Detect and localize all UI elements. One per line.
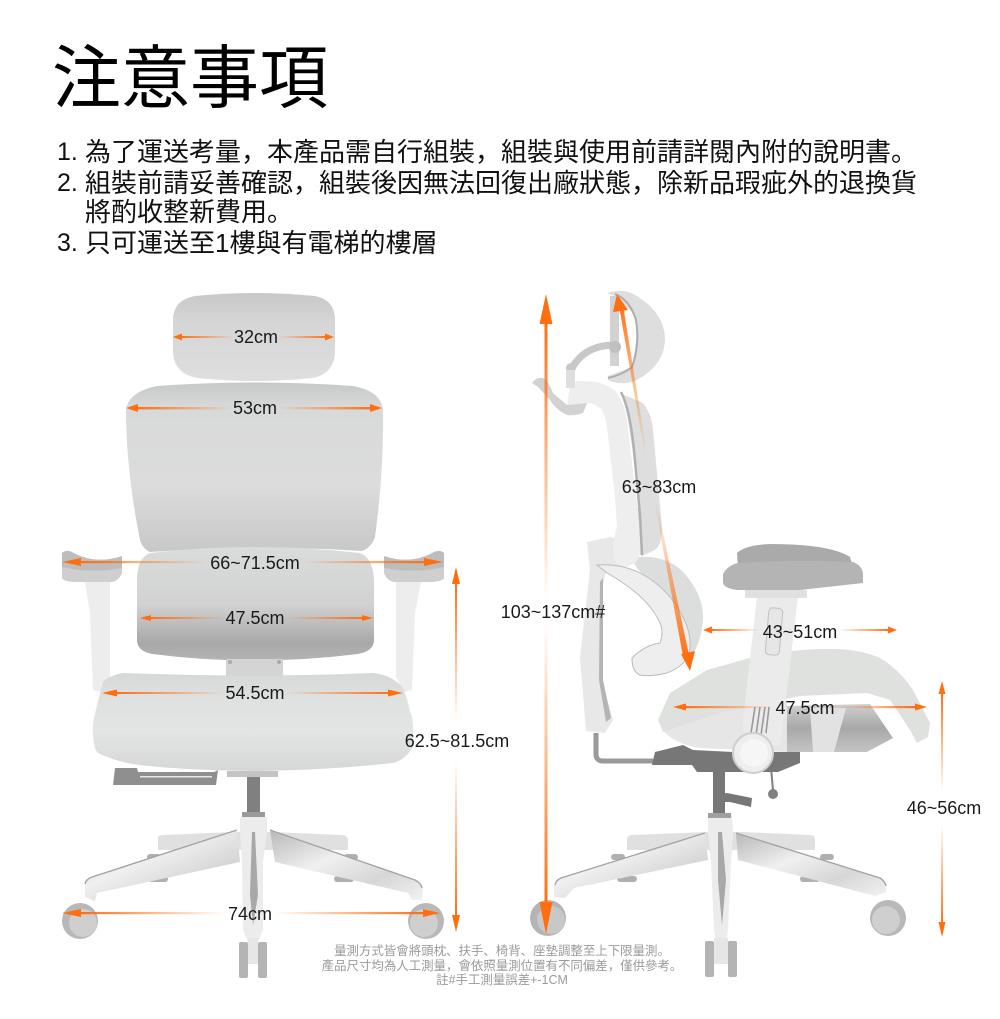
side: rear frame — [580, 537, 623, 733]
footnote: 註#手工測量誤差+-1CM — [436, 973, 568, 987]
arrow: back height 63~83cm — [613, 294, 695, 671]
arrow: seat depth 43~51cm — [703, 626, 897, 634]
side: base feet — [611, 854, 834, 882]
arrow: seat length 47.5cm — [673, 704, 927, 710]
arrow: base width 74cm — [62, 909, 440, 917]
label: 66~71.5cm: 66~71.5cm — [210, 553, 300, 573]
side: lumbar frame — [597, 565, 690, 676]
side: back frame seam — [621, 392, 642, 555]
footnote — [322, 944, 682, 987]
side: back handle — [532, 378, 587, 415]
side: rear bracket — [596, 733, 656, 761]
text block: notes list — [57, 137, 917, 258]
text block: notes list: 2. — [57, 169, 78, 197]
arrow: seat height 46~56cm — [938, 681, 946, 937]
side: arm post — [743, 597, 798, 745]
text block: notes list: 將酌收整新費用。 — [85, 197, 293, 227]
label: 46~56cm: 46~56cm — [907, 798, 981, 818]
side: seat pan — [662, 700, 787, 752]
title: 注意事項 — [52, 40, 328, 117]
label: 47.5cm seat: 47.5cm — [775, 698, 835, 718]
side: base plate — [627, 832, 815, 850]
arrow: seat width 54.5cm — [102, 690, 403, 696]
label: 53cm: 53cm — [233, 398, 277, 418]
arrow: headrest width 32cm — [173, 334, 334, 340]
front: left caster — [62, 903, 98, 939]
label: 103~137cm#: 103~137cm# — [501, 602, 605, 622]
side: mechanism — [652, 745, 800, 772]
side: gas lift and lever — [708, 770, 752, 818]
text block: notes list: 只可運送至1樓與有電梯的樓層 — [85, 228, 437, 258]
side: lumbar cushion — [630, 557, 703, 660]
side: front caster — [705, 938, 737, 977]
label: 62.5~81.5cm: 62.5~81.5cm — [405, 731, 509, 751]
side: seat mesh underside — [787, 704, 893, 752]
label: 43~51cm: 43~51cm — [763, 622, 837, 642]
side: pivot cap — [733, 733, 773, 773]
footnote: 量測方式皆會將頭枕、扶手、椅背、座墊調整至上下限量測。 — [334, 944, 670, 958]
front: left arm post — [85, 582, 110, 692]
side: arm post button slot — [765, 607, 783, 656]
front: left base leg — [85, 830, 240, 901]
front: backrest — [126, 382, 383, 552]
front: right base leg — [270, 830, 423, 900]
front: tilt lever — [113, 768, 218, 785]
side: armrest pad — [723, 544, 863, 598]
side: headrest — [607, 291, 665, 383]
arrow: total height 103~137cm — [540, 294, 552, 934]
side: seat strap — [810, 708, 846, 752]
arrow: lumbar width 47.5cm — [140, 615, 373, 621]
front: base plate — [158, 832, 348, 850]
label: 54.5cm: 54.5cm — [225, 683, 285, 703]
side: seat cushion — [658, 649, 930, 743]
front: front caster — [239, 938, 267, 978]
front: right caster — [408, 903, 444, 939]
front: right armrest — [384, 551, 444, 582]
arrow: arm height 62.5~81.5cm — [452, 567, 460, 932]
front: gas lift — [227, 771, 278, 818]
label: 32cm: 32cm — [234, 327, 278, 347]
front: base small feet — [147, 854, 358, 882]
text block: notes list: 1. — [57, 138, 78, 166]
front view of chair — [62, 293, 444, 978]
side: back cushion — [620, 393, 662, 556]
side: headrest rod — [610, 296, 619, 366]
front: center base leg — [240, 817, 267, 942]
side: rear frame inner shadow — [599, 578, 611, 722]
side: right caster — [870, 900, 906, 936]
side: back frame — [567, 381, 641, 567]
side: left base leg — [554, 833, 708, 898]
label: 47.5cm lumbar: 47.5cm — [225, 608, 285, 628]
side: right base leg — [736, 833, 886, 896]
label: 63~83cm: 63~83cm — [622, 477, 696, 497]
text block: notes list: 為了運送考量，本產品需自行組裝，組裝與使用前請詳閱內附的說明書。 — [85, 137, 917, 167]
arrow: arm span 66~71.5cm — [62, 558, 443, 566]
footnote: 產品尺寸均為人工測量，會依照量測位置有不同偏差，僅供參考。 — [322, 958, 682, 972]
arrow: back width 53cm — [126, 404, 382, 412]
label: 74cm: 74cm — [228, 904, 272, 924]
front: seat connector — [226, 659, 283, 677]
front: right arm post — [396, 582, 421, 692]
side: headrest bracket — [566, 341, 621, 388]
side view of chair — [530, 291, 930, 977]
front: seat — [93, 673, 413, 771]
front: lumbar cushion — [137, 547, 374, 660]
front: left armrest — [62, 551, 122, 582]
side: center base leg — [708, 815, 733, 942]
side: adjust knob — [768, 768, 778, 799]
side: left caster — [530, 900, 566, 936]
text block: notes list: 3. — [57, 229, 78, 257]
side: arm post ribs — [751, 707, 769, 735]
front: headrest — [173, 293, 335, 381]
text block: notes list: 組裝前請妥善確認，組裝後因無法回復出廠狀態，除新品瑕疵外的退換貨 — [85, 168, 917, 198]
